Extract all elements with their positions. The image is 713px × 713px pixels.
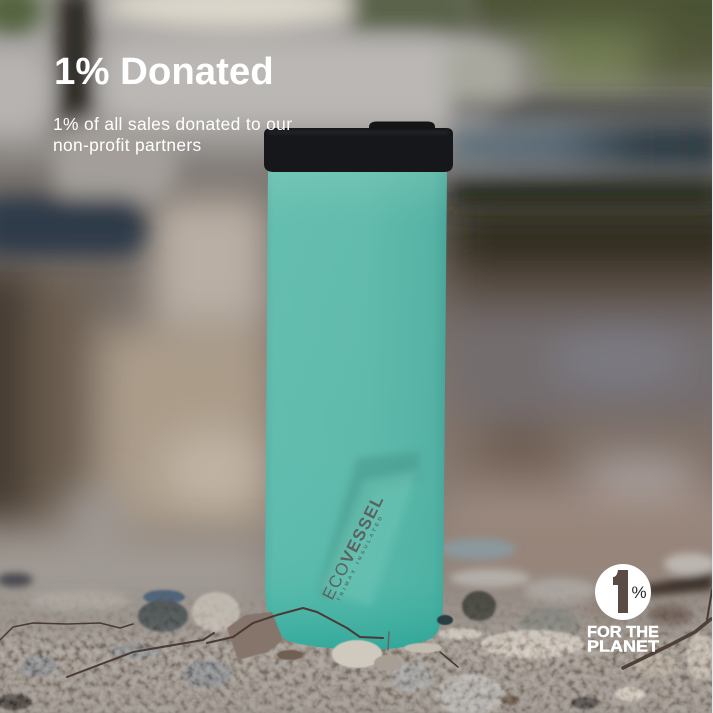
logo recess on bottle: [318, 452, 420, 606]
title: 1% Donated: [54, 50, 274, 93]
logo wordmark: FOR THE: [587, 624, 659, 641]
bottle body: [265, 168, 447, 650]
logo: 1% for the planet: [587, 564, 659, 656]
logo badge with 1%: %: [631, 583, 647, 602]
description text: 1% of all sales donated to our: [53, 114, 292, 134]
bottle logo text: ECOVESSEL: [319, 493, 387, 603]
gravel ground: [0, 491, 713, 713]
bottle: [264, 122, 453, 650]
lid: [264, 122, 453, 172]
description text: non-profit partners: [53, 135, 202, 155]
bottle logo text: TRIMAX INSULATED: [336, 513, 385, 602]
description text: [53, 114, 292, 155]
right edge strip: [712, 0, 713, 713]
logo: 1% for the planet: PLANET: [587, 638, 659, 656]
foreground rocks and twigs: [0, 590, 712, 677]
